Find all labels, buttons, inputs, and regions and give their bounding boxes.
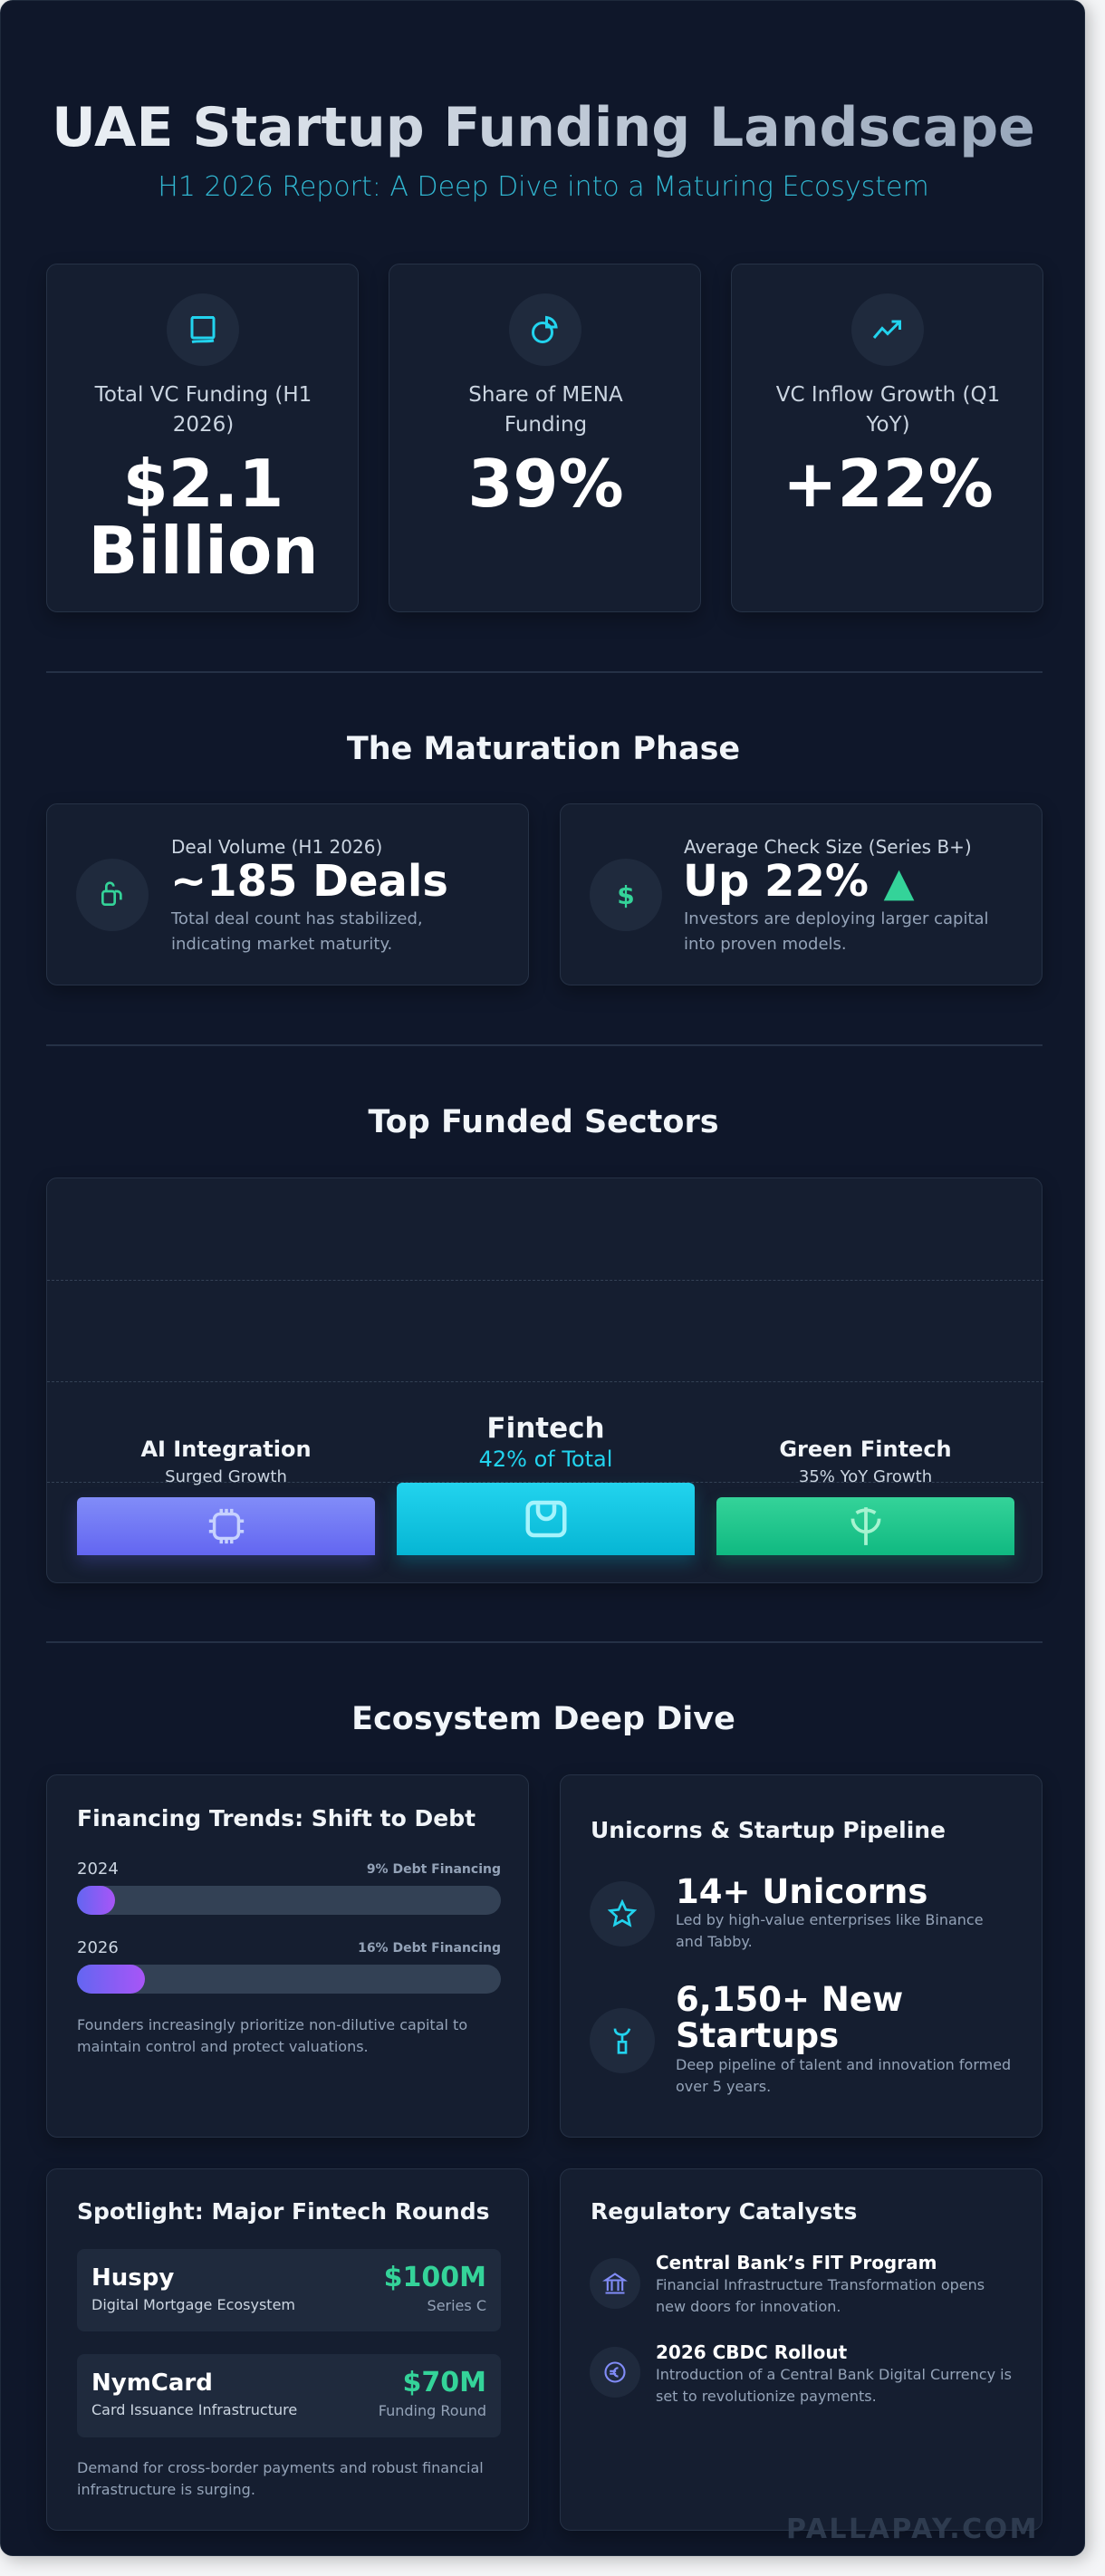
title: UAE Startup Funding Landscape bbox=[52, 96, 1035, 159]
round: Huspy bbox=[77, 2249, 501, 2331]
stat card: VC inflow growth bbox=[731, 264, 1043, 612]
icon: pie bbox=[509, 293, 581, 366]
bar: AI integration: Surged Growth bbox=[165, 1467, 287, 1486]
round: NymCard: Card Issuance Infrastructure bbox=[91, 2401, 297, 2418]
catalyst: CBDC rollout: Introduction of a Central Bank Digital Currency is set to revolutionize payments. bbox=[656, 2366, 1012, 2405]
startups stat: 6,150+ New Startups bbox=[676, 1980, 903, 2055]
round: Huspy: $100M bbox=[384, 2262, 486, 2293]
watermark: PALLAPAY.COM bbox=[786, 2514, 1039, 2545]
description: Investors are deploying larger capital into proven models. bbox=[684, 909, 989, 954]
value: 39% bbox=[467, 446, 624, 522]
description: Founders increasingly prioritize non-dilutive capital to maintain control and protect valuations. bbox=[77, 2016, 467, 2055]
value: ~185 Deals bbox=[170, 856, 448, 907]
label: Average Check Size (Series B+) bbox=[684, 836, 972, 858]
bar: fintech: Fintech bbox=[486, 1412, 605, 1445]
icon: mug bbox=[76, 859, 149, 931]
bar: fintech bbox=[390, 1412, 701, 1569]
icon: trend up bbox=[851, 293, 924, 366]
heading: maturation phase: The Maturation Phase bbox=[347, 731, 740, 767]
heading: ecosystem deep dive: Ecosystem Deep Dive bbox=[351, 1701, 735, 1737]
round: NymCard bbox=[77, 2354, 501, 2437]
label: Deal Volume (H1 2026) bbox=[171, 836, 382, 858]
bar: AI integration: AI Integration bbox=[140, 1437, 312, 1462]
description: Total deal count has stabilized, indicating market maturity. bbox=[171, 909, 423, 954]
card: average check size bbox=[560, 803, 1043, 985]
round: Huspy: Series C bbox=[428, 2297, 486, 2314]
bar chart: sectors bbox=[46, 1177, 1043, 1583]
bar 2026: 2026 bbox=[77, 1938, 119, 1957]
unicorns stat: Led by high-value enterprises like Binance and Tabby. bbox=[676, 1911, 984, 1950]
round: NymCard: $70M bbox=[403, 2367, 486, 2398]
catalyst: FIT program: Central Bank’s FIT Program bbox=[656, 2252, 937, 2273]
catalyst: CBDC rollout bbox=[590, 2341, 1012, 2405]
bar: green fintech: 35% YoY Growth bbox=[799, 1467, 932, 1486]
bar: green fintech bbox=[710, 1437, 1020, 1569]
startups stat bbox=[676, 1980, 1011, 2095]
value: +22% bbox=[783, 446, 994, 522]
catalyst: FIT program: Financial Infrastructure Transformation opens new doors for innovation. bbox=[656, 2276, 985, 2315]
startups stat: Deep pipeline of talent and innovation formed over 5 years. bbox=[676, 2056, 1011, 2095]
bar 2024 bbox=[77, 1860, 501, 1915]
icon: wallet bbox=[167, 293, 239, 366]
unicorns stat: 14+ Unicorns bbox=[676, 1872, 927, 1911]
icon: star bbox=[590, 1881, 655, 1946]
round: NymCard: Funding Round bbox=[379, 2402, 486, 2419]
catalyst: FIT program bbox=[590, 2252, 985, 2315]
label: VC Inflow Growth (Q1 YoY) bbox=[776, 383, 1000, 437]
panel title: Spotlight: Major Fintech Rounds bbox=[77, 2198, 490, 2225]
panel: financing trends bbox=[46, 1774, 529, 2138]
bar 2026 bbox=[77, 1938, 501, 1994]
icon: dollar bbox=[590, 859, 662, 931]
bar: green fintech: Green Fintech bbox=[779, 1437, 952, 1462]
panel title: Unicorns & Startup Pipeline bbox=[591, 1817, 946, 1843]
icon: dollar: $ bbox=[617, 880, 635, 909]
subtitle: H1 2026 Report: A Deep Dive into a Maturing Ecosystem bbox=[158, 171, 929, 203]
panel: spotlight fintech rounds bbox=[46, 2168, 529, 2531]
catalyst: CBDC rollout: 2026 CBDC Rollout bbox=[656, 2341, 847, 2363]
stat card: MENA share bbox=[389, 264, 701, 612]
label: Share of MENA Funding bbox=[468, 383, 623, 437]
value: $2.1 Billion bbox=[88, 446, 319, 589]
round: NymCard: NymCard bbox=[91, 2369, 213, 2397]
round: Huspy: Huspy bbox=[91, 2264, 174, 2292]
icon: sprout bbox=[590, 2008, 655, 2073]
bar 2026: 16% Debt Financing bbox=[358, 1941, 501, 1956]
panel: regulatory catalysts bbox=[560, 2168, 1043, 2531]
description: Demand for cross-border payments and robust financial infrastructure is surging. bbox=[77, 2459, 484, 2498]
card: deal volume bbox=[46, 803, 529, 985]
bar: AI integration bbox=[71, 1437, 382, 1569]
panel: unicorns & pipeline bbox=[560, 1774, 1043, 2138]
stat card: total VC funding bbox=[46, 264, 359, 612]
label: Total VC Funding (H1 2026) bbox=[95, 383, 312, 437]
panel title: Financing Trends: Shift to Debt bbox=[77, 1805, 476, 1831]
unicorns stat bbox=[676, 1872, 984, 1950]
bar: fintech: 42% of Total bbox=[479, 1447, 612, 1472]
value: Up 22% ▲ bbox=[683, 856, 915, 907]
panel title: Regulatory Catalysts bbox=[591, 2198, 857, 2225]
bar 2024: 9% Debt Financing bbox=[367, 1862, 501, 1877]
bar 2024: 2024 bbox=[77, 1860, 119, 1879]
heading: top funded sectors: Top Funded Sectors bbox=[368, 1104, 719, 1140]
round: Huspy: Digital Mortgage Ecosystem bbox=[91, 2296, 295, 2313]
